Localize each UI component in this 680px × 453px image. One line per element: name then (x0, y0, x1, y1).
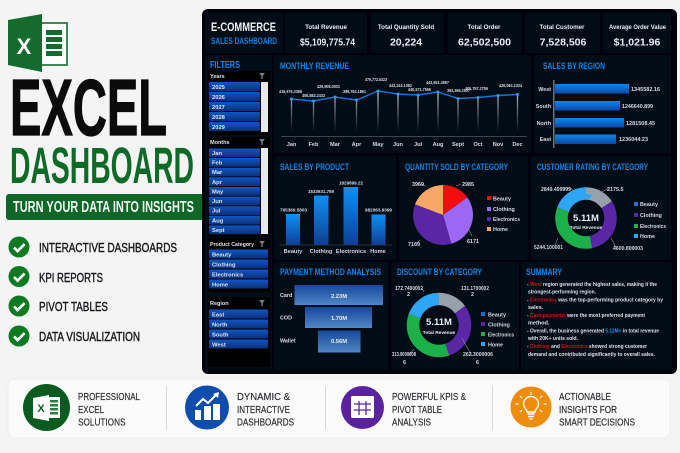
line chart: monthly revenue: 406,883.2433 (302, 93, 325, 98)
panel: dashboard title: E-COMMERCE (211, 20, 276, 34)
line chart: monthly revenue: Aug (433, 142, 444, 148)
line chart: monthly revenue: 429,908.0031 (317, 84, 340, 89)
check item: data visualization (8, 326, 140, 346)
legend: quantity sold: Clothing (493, 207, 515, 213)
line chart: monthly revenue: 479,772.5323 (365, 77, 387, 82)
panel: monthly revenue: MONTHLY REVENUE (280, 61, 349, 72)
filter: product category (208, 238, 270, 292)
legend: quantity sold (487, 196, 520, 233)
summary text: sales. (528, 305, 544, 311)
KPI: total order: Total Order (468, 24, 501, 31)
summary text: - Clothing and Electronics showed strong customer (527, 344, 648, 350)
feature: powerful KPIs and pivot table analysis: PIVOT TABLE (392, 405, 442, 416)
filter: product category: Clothing (212, 262, 236, 268)
KPI: average order value (603, 13, 671, 53)
check item: KPI reports: KPI REPORTS (39, 270, 103, 285)
line chart: monthly revenue: Sept (452, 142, 464, 148)
panel: sales by product: SALES BY PRODUCT (280, 162, 349, 173)
legend: discount: Clothing (488, 322, 510, 328)
filter: months: Apr (212, 180, 223, 186)
legend: customer rating: Electronics (640, 224, 666, 230)
legend: quantity sold: Electronics (493, 217, 520, 223)
feature: powerful KPIs and pivot table analysis: ANALYSIS (392, 418, 431, 428)
filter: region: Region (210, 301, 229, 307)
filter: product category: Electronics (212, 272, 243, 278)
feature: actionable insights: ACTIONABLE (559, 392, 611, 403)
legend: customer rating (634, 202, 666, 240)
KPI: total order: 62,502,500 (458, 36, 511, 48)
dashboard (202, 9, 677, 374)
line chart: monthly revenue: Jan (287, 142, 297, 148)
summary text (527, 282, 664, 358)
filter: years: 2028 (212, 115, 226, 121)
line chart: monthly revenue: Mar (330, 142, 341, 148)
line chart: monthly revenue: 440,571.7556 (408, 87, 431, 92)
KPI: total customer: 7,528,506 (540, 36, 587, 48)
legend: customer rating: Home (640, 234, 655, 240)
feature: dynamic interactive dashboards: INTERACTIVE (237, 405, 290, 416)
filter: region: West (212, 342, 226, 348)
feature: powerful KPIs and pivot table analysis: POWERFUL KPIS & (392, 392, 466, 403)
donut chart: discount: 6 (403, 360, 406, 366)
funnel chart: payment method: Wallet (280, 338, 296, 344)
panel: quantity sold by category (399, 156, 528, 260)
legend: discount: Home (488, 342, 503, 348)
panel: quantity sold by category: QUANTITY SOLD BY CATEGORY (405, 162, 508, 173)
summary text: - Electronics was the top-performing product category by (527, 298, 664, 304)
panel: customer rating by category (531, 156, 671, 260)
legend: discount: Electronics (488, 332, 514, 338)
panel: summary: SUMMARY (526, 267, 562, 278)
feature: actionable insights: INSIGHTS FOR (559, 405, 617, 416)
legend: customer rating: Clothing (640, 213, 662, 219)
line chart: monthly revenue: 405,757.2755 (465, 86, 488, 91)
donut chart: customer rating: 4600.800003 (613, 246, 643, 252)
summary text: - Card payments were the most preferred payment (527, 313, 645, 319)
filter: years: Years (210, 74, 225, 80)
KPI: average order value: Average Order Value (609, 24, 667, 31)
panel: sales by region: SALES BY REGION (543, 61, 605, 72)
funnel chart: payment method: COD (280, 316, 292, 322)
filter: months: Aug (212, 218, 224, 224)
panel: filters: FILTERS (210, 60, 240, 71)
KPI: total revenue: $5,109,775.74 (300, 36, 355, 48)
feature: professional excel solutions (23, 384, 140, 431)
donut chart: discount: Total Revenue (423, 330, 456, 336)
pie chart: quantity sold: 6171 (467, 239, 479, 245)
pie chart: quantity sold (408, 182, 479, 248)
summary text: - Overall, the business generated 5.11M+ in total revenue (527, 328, 659, 334)
bar chart: sales by region: West (538, 87, 551, 93)
donut chart: discount: 313.9000008 (392, 352, 416, 358)
donut chart: customer rating: Total Revenue (570, 225, 603, 231)
panel: payment method analysis: PAYMENT METHOD ANALYSIS (280, 267, 381, 278)
line chart: monthly revenue: Oct (473, 142, 483, 148)
bar chart: sales by product: Electronics (336, 249, 366, 255)
panel: filters (205, 55, 272, 370)
pie chart: quantity sold: 7169 (408, 242, 420, 248)
bar chart: sales by product: 1533931.759 (308, 189, 334, 194)
legend: customer rating: Beauty (640, 202, 658, 208)
line chart: monthly revenue: Feb (309, 142, 319, 148)
donut chart: discount: 5.11M (426, 317, 452, 328)
panel: sales by product (274, 156, 396, 260)
bar chart: sales by region (536, 80, 660, 148)
KPI: total quantity sold: Total Quantity Sold (378, 24, 434, 31)
legend: discount (481, 312, 514, 348)
footer card (8, 379, 670, 438)
pie chart: quantity sold: 2985 (462, 182, 474, 188)
panel: summary (521, 262, 672, 370)
donut chart: discount: 131.1700002 (461, 286, 489, 292)
check item: data visualization: DATA VISUALIZATION (39, 329, 140, 344)
line chart: monthly revenue: 443,243.1082 (389, 83, 412, 88)
bar chart: sales by region: 1236044.23 (619, 137, 648, 143)
filter: months: Months (210, 140, 230, 146)
line chart: monthly revenue: Nov (493, 142, 504, 148)
feature: professional excel solutions: X (37, 403, 45, 415)
panel: discount by category: DISCOUNT BY CATEGORY (397, 267, 482, 278)
summary text: - West region generated the highest sales, making it the (527, 282, 657, 288)
KPI: average order value: $1,021.96 (614, 36, 661, 48)
filter: months: Jan (212, 151, 222, 157)
banner: turn your data into insights (6, 194, 206, 220)
bar chart: sales by product: Home (370, 249, 386, 255)
filter: years (208, 71, 270, 135)
icon: Excel logo: X (17, 34, 32, 59)
donut chart: customer rating: 2849.499999 (541, 187, 571, 193)
summary text: method. (528, 320, 550, 326)
bar chart: sales by region: 1281508.45 (626, 121, 655, 127)
filter: region: North (212, 322, 228, 328)
donut chart: customer rating: 5.11M (573, 213, 599, 224)
feature: actionable insights: SMART DECISIONS (559, 418, 635, 428)
line chart: monthly revenue: Apr (352, 142, 362, 148)
filter: region: South (212, 332, 229, 338)
donut chart: discount: 2 (407, 292, 410, 298)
feature: dynamic interactive dashboards: DASHBOARDS (237, 418, 294, 428)
panel: discount by category (391, 262, 519, 370)
line chart: monthly revenue: 426,084.2334 (499, 83, 522, 88)
panel: payment method analysis (274, 262, 388, 370)
KPI: total customer (525, 13, 600, 53)
legend: quantity sold: Home (493, 227, 508, 233)
line chart: monthly revenue: 389,763.1861 (343, 89, 366, 94)
icon: Excel logo (8, 14, 67, 72)
line chart: monthly revenue: Dec (512, 142, 523, 148)
filter: months: Jun (212, 199, 223, 205)
funnel chart: payment method: 1.70M (331, 316, 347, 322)
line chart: monthly revenue: 443,651.3997 (426, 80, 449, 85)
KPI: total revenue (285, 13, 367, 53)
funnel chart: payment method: Card (280, 293, 292, 299)
bar chart: sales by region: 1345582.16 (631, 87, 660, 93)
filter: region (208, 297, 270, 367)
bar chart: sales by region: East (540, 137, 551, 143)
line chart: monthly revenue: Jul (414, 142, 422, 148)
title: EXCEL: EXCEL (10, 63, 167, 152)
donut chart: discount: 262.3000006 (463, 352, 493, 358)
summary text: strongest-performing region. (528, 290, 596, 296)
legend: discount: Beauty (488, 312, 506, 318)
bar chart: sales by product: Beauty (284, 249, 303, 255)
KPI: total customer: Total Customer (540, 24, 585, 31)
check item: interactive dashboards: INTERACTIVE DASHBOARDS (39, 240, 177, 255)
funnel chart: payment method (280, 285, 383, 352)
line chart: monthly revenue: Jun (393, 142, 404, 148)
funnel chart: payment method: 0.56M (331, 339, 347, 345)
donut chart: customer rating: 2175.5 (607, 187, 624, 193)
panel: sales by region (534, 55, 671, 153)
banner: turn your data into insights: TURN YOUR DATA INTO INSIGHTS (13, 199, 194, 216)
filter: months: Feb (212, 160, 223, 166)
feature: professional excel solutions: PROFESSIONAL (78, 392, 140, 403)
filter: months: May (212, 190, 224, 196)
panel: dashboard title (205, 13, 283, 53)
feature: professional excel solutions: EXCEL (78, 405, 104, 416)
filter: months: Jul (212, 209, 221, 215)
feature: actionable insights (510, 386, 635, 428)
line chart: monthly revenue: 416,676.3368 (279, 89, 302, 94)
feature: dynamic interactive dashboards: DYNAMIC & (237, 392, 290, 403)
check item: interactive dashboards (8, 236, 177, 258)
check item: KPI reports (8, 266, 103, 287)
summary text: with 20K+ units sold. (527, 336, 578, 342)
bar chart: sales by region: South (536, 104, 551, 110)
KPI: total quantity sold (371, 13, 444, 53)
filter: years: 2025 (212, 85, 226, 91)
line chart: monthly revenue (279, 77, 527, 148)
filter: months (208, 137, 270, 237)
KPI: total quantity sold: 20,224 (390, 36, 422, 48)
line chart: monthly revenue: 392,266.2507 (447, 88, 470, 93)
filter: months: Sept (212, 228, 225, 234)
filter: years: 2027 (212, 105, 225, 111)
filter: years: 2029 (212, 125, 226, 131)
bar chart: sales by region: North (537, 121, 551, 127)
filter: months: Mar (212, 170, 223, 176)
check item: pivot tables: PIVOT TABLES (39, 299, 108, 314)
feature: dynamic interactive dashboards (185, 386, 294, 430)
legend: quantity sold: Beauty (493, 196, 511, 202)
donut chart: discount (392, 286, 493, 366)
donut chart: discount: 6 (476, 360, 479, 366)
check item: pivot tables (8, 296, 108, 316)
panel: monthly revenue (274, 55, 531, 153)
feature list (8, 236, 177, 346)
bar chart: sales by product: Clothing (310, 249, 333, 255)
filter: product category: Product Category (210, 242, 255, 248)
line chart: monthly revenue: May (373, 142, 384, 148)
KPI: total revenue: Total Revenue (305, 24, 347, 31)
bar chart: sales by product: 982063.9399 (365, 208, 392, 212)
donut chart: discount: 172.7400002 (395, 286, 423, 292)
donut chart: customer rating: 5244.100001 (534, 245, 563, 251)
donut chart: discount: 2 (471, 292, 474, 298)
bar chart: sales by region: 1246640.899 (622, 104, 653, 110)
title: DASHBOARD: DASHBOARD (10, 137, 194, 194)
filter: region: East (212, 312, 224, 318)
donut chart: customer rating (534, 187, 643, 252)
bar chart: sales by product (279, 180, 392, 255)
pie chart: quantity sold: 3969 (412, 182, 424, 188)
summary text: demand and contributed significantly to overall sales. (528, 352, 655, 358)
feature: powerful KPIs and pivot table analysis (341, 386, 466, 429)
feature: professional excel solutions: SOLUTIONS (78, 418, 126, 428)
bar chart: sales by product: 1829899.22 (339, 180, 363, 186)
filter: product category: Beauty (212, 252, 232, 258)
panel: dashboard title: SALES DASHBOARD (211, 36, 277, 46)
KPI: total order (448, 13, 522, 53)
filter: product category: Home (212, 282, 229, 288)
bar chart: sales by product: 765360.5803 (280, 208, 307, 212)
funnel chart: payment method: 2.23M (331, 294, 347, 300)
filter: years: 2026 (212, 95, 226, 101)
